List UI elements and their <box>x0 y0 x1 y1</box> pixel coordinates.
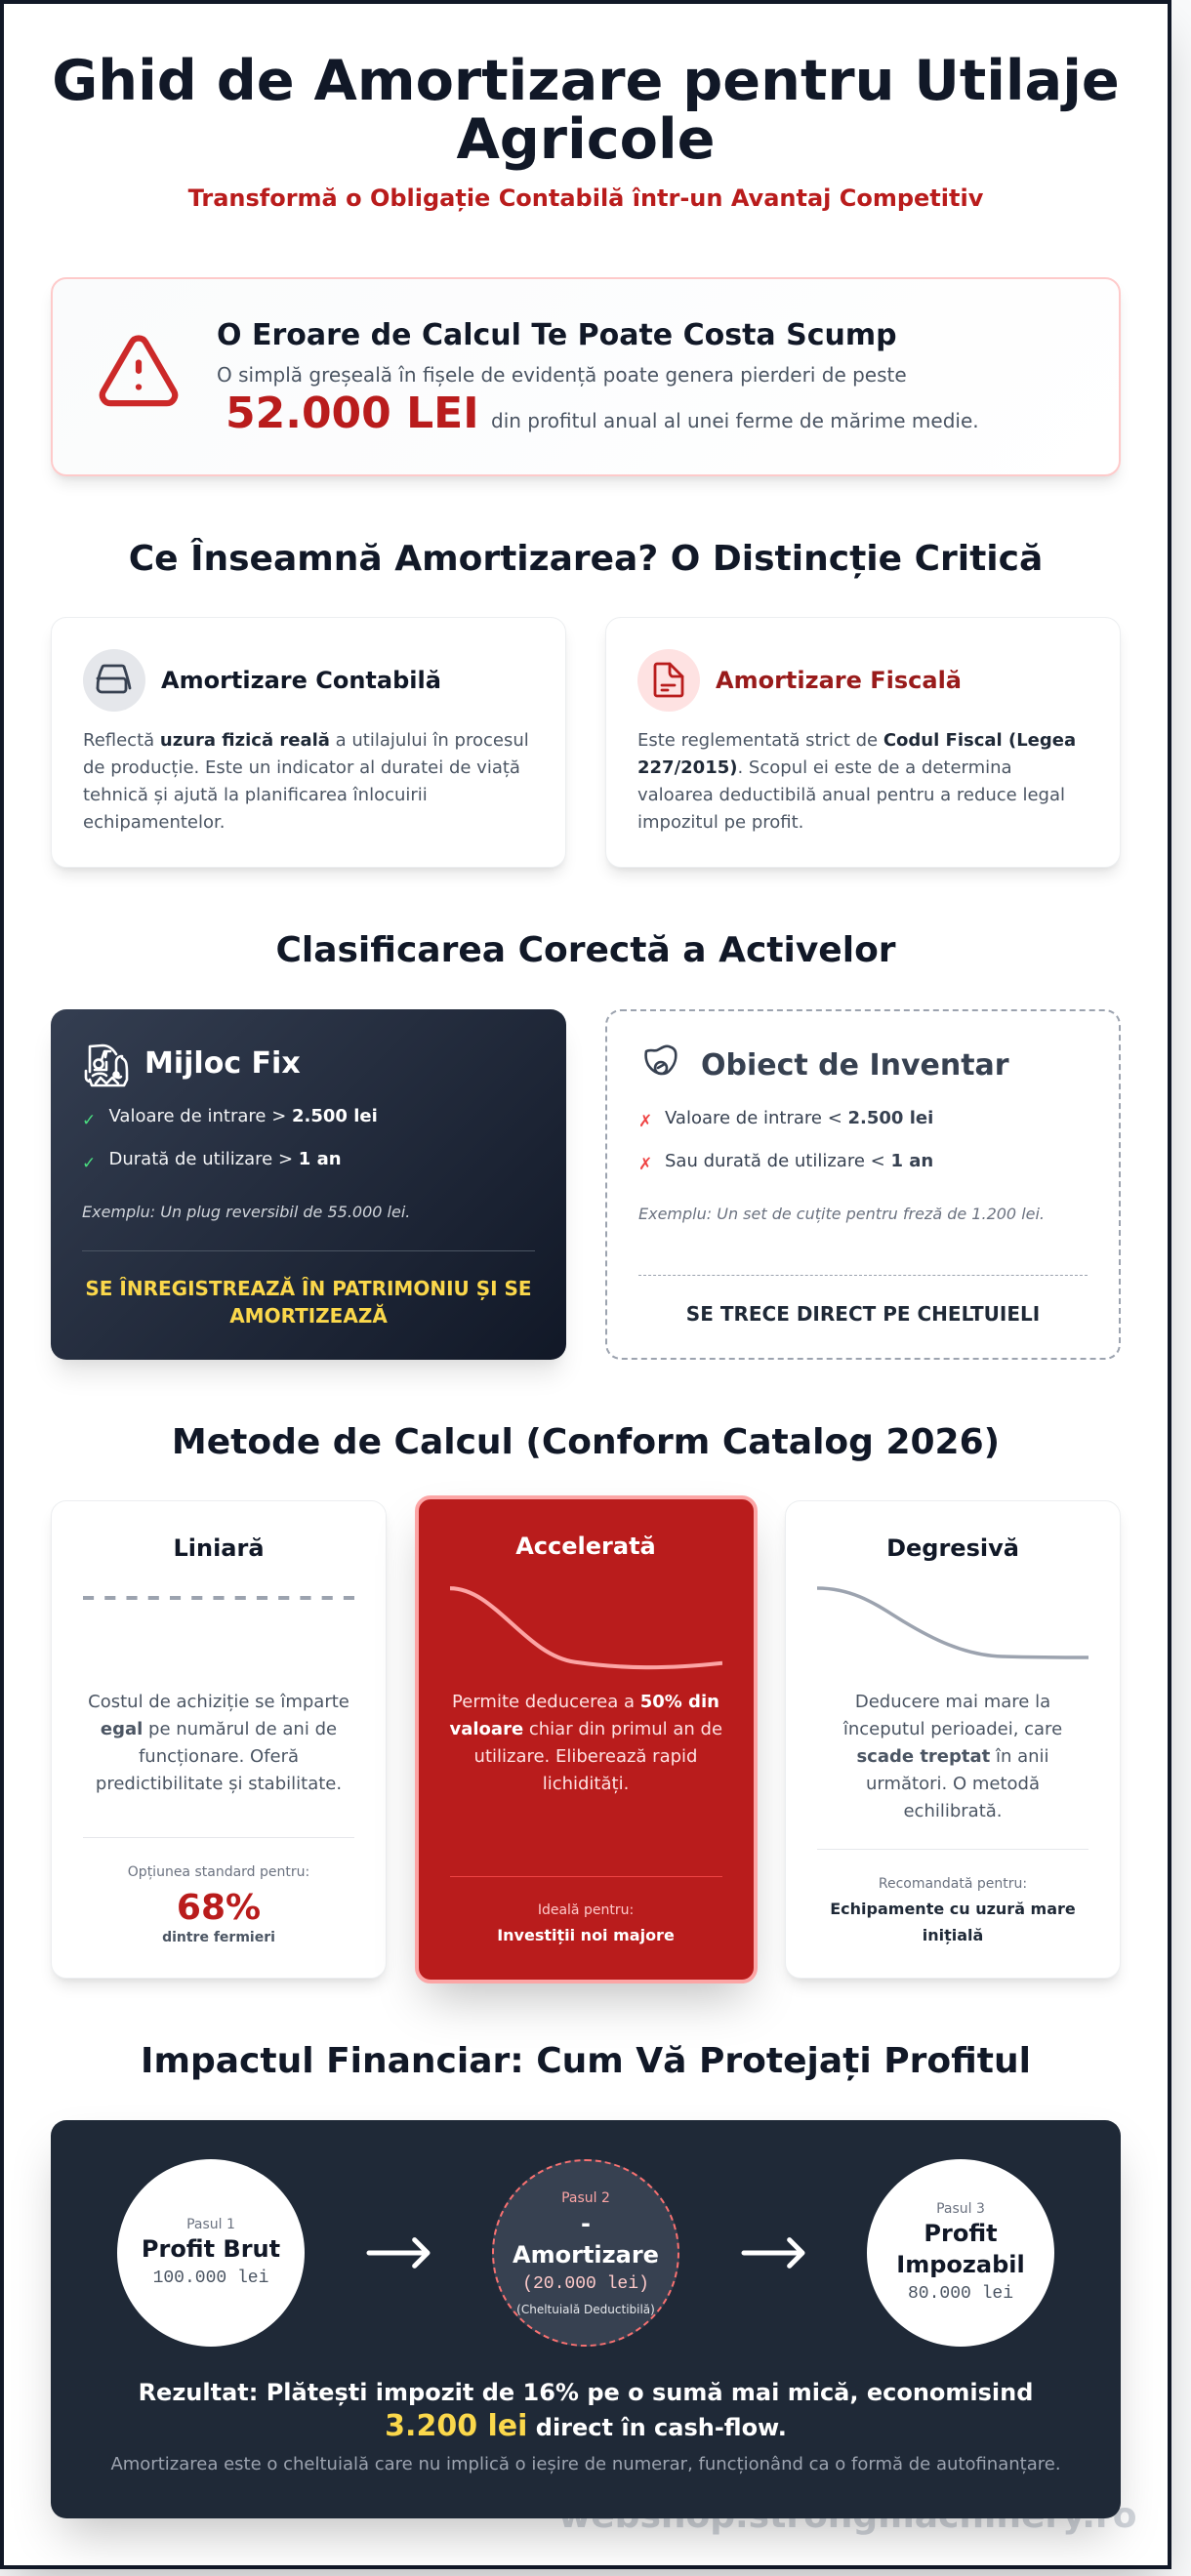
step value: 80.000 lei <box>908 2284 1013 2304</box>
alert text: O simplă greșeală în fișele de evidență poate genera pierderi de peste <box>217 363 907 387</box>
subtitle: Transformă o Obligație Contabilă într-un Avantaj Competitiv <box>188 184 983 212</box>
method text: Permite deducerea a 50% din <box>452 1692 719 1712</box>
step name: - <box>581 2210 591 2237</box>
target <box>830 1900 1076 1944</box>
method text <box>449 1692 722 1794</box>
card title: Amortizare Contabilă <box>161 667 441 694</box>
verdict <box>85 1277 532 1328</box>
step label: Pasul 3 <box>936 2201 985 2217</box>
card text: de producție. Este un indicator al duratei de viață <box>83 757 520 778</box>
panel: linear method <box>51 1500 387 1979</box>
watermark: webshop.strongmachinery.ro <box>558 2496 1136 2536</box>
panel: accelerated method <box>414 1495 758 1983</box>
note: Recomandată pentru: <box>879 1876 1027 1892</box>
card text: impozitul pe profit. <box>637 812 803 833</box>
step name: Impozabil <box>896 2251 1025 2278</box>
criterion text: Durată de utilizare > 1 an <box>109 1149 342 1169</box>
title: Agricole <box>456 106 716 172</box>
method text: funcționare. Oferă <box>139 1746 299 1767</box>
target: Echipamente cu uzură mare <box>830 1900 1076 1918</box>
card text: Reflectă uzura fizică reală a utilajului în procesul <box>83 730 529 751</box>
step value: (20.000 lei) <box>522 2274 649 2294</box>
criterion 2 <box>82 1149 342 1173</box>
check mark: ✓ <box>82 1154 96 1173</box>
card text <box>637 730 1076 833</box>
step value: 100.000 lei <box>153 2269 268 2288</box>
method text: valoare chiar din primul an de <box>449 1719 722 1739</box>
step name <box>513 2210 659 2269</box>
example: Exemplu: Un plug reversibil de 55.000 lei. <box>82 1203 410 1221</box>
arrow 1 <box>367 2237 430 2269</box>
step 1 circle <box>117 2159 305 2347</box>
criterion text: Valoare de intrare < 2.500 lei <box>665 1108 933 1128</box>
criterion 1 <box>638 1108 933 1131</box>
panel: financial impact <box>51 2120 1121 2518</box>
card text: Este reglementată strict de Codul Fiscal (Legea <box>637 730 1076 751</box>
criterion 2 <box>638 1151 933 1174</box>
method text <box>843 1692 1062 1821</box>
method text: Deducere mai mare la <box>855 1692 1050 1712</box>
card text <box>83 730 529 833</box>
verdict: AMORTIZEAZĂ <box>229 1304 388 1328</box>
criterion text: Sau durată de utilizare < 1 an <box>665 1151 933 1171</box>
criterion 1 <box>82 1106 378 1130</box>
heading: financial impact: Impactul Financiar: Cum Vă Protejați Profitul <box>141 2041 1031 2081</box>
alert text end: din profitul anual al unei ferme de mărime medie. <box>491 409 979 432</box>
title <box>52 48 1120 172</box>
heading: classification: Clasificarea Corectă a Activelor <box>275 930 896 970</box>
card text: 227/2015). Scopul ei este de a determina <box>637 757 1012 778</box>
target: inițială <box>923 1925 983 1944</box>
cross mark: ✗ <box>638 1112 652 1131</box>
chart: accelerated curve <box>450 1586 722 1669</box>
panel: alert <box>51 277 1121 476</box>
chart: linear line <box>83 1596 354 1600</box>
panel: fiscal depreciation <box>605 617 1121 868</box>
step 2 circle <box>492 2159 679 2347</box>
method text: echilibrată. <box>903 1801 1003 1821</box>
verdict: SE ÎNREGISTREAZĂ ÎN PATRIMONIU ȘI SE <box>85 1277 532 1300</box>
method text: începutul perioadei, care <box>843 1719 1062 1739</box>
note: Ideală pentru: <box>538 1902 634 1918</box>
method text: următori. O metodă <box>866 1774 1040 1794</box>
step name <box>896 2220 1025 2278</box>
method text: egal pe numărul de ani de <box>101 1719 337 1739</box>
step name: Profit <box>924 2220 998 2247</box>
cross mark: ✗ <box>638 1155 652 1174</box>
check mark: ✓ <box>82 1111 96 1130</box>
card text: echipamentelor. <box>83 812 225 833</box>
method text: predictibilitate și stabilitate. <box>96 1774 342 1794</box>
alert amount: 52.000 LEI <box>226 388 479 438</box>
step note: (Cheltuială Deductibilă) <box>516 2303 655 2316</box>
method text: utilizare. Eliberează rapid <box>474 1746 697 1767</box>
panel: inventory object <box>605 1009 1121 1360</box>
panel: degressive method <box>785 1500 1121 1979</box>
result: 3.200 lei direct în cash-flow. <box>385 2409 787 2442</box>
method title: Degresivă <box>886 1534 1019 1562</box>
heading: methods: Metode de Calcul (Conform Catalog 2026) <box>172 1422 1000 1462</box>
chart: degressive curve <box>817 1586 1088 1659</box>
title: Ghid de Amortizare pentru Utilaje <box>52 48 1120 113</box>
example: Exemplu: Un set de cuțite pentru freză de 1.200 lei. <box>638 1205 1045 1223</box>
icon: accounting <box>83 649 145 712</box>
alert heading: O Eroare de Calcul Te Poate Costa Scump <box>217 318 897 352</box>
card text: valoarea deductibilă anual pentru a reduce legal <box>637 785 1065 805</box>
result <box>139 2379 1033 2442</box>
method text: Costul de achiziție se împarte <box>88 1692 349 1712</box>
icon: inventory tool <box>644 1044 678 1076</box>
card title: Obiect de Inventar <box>701 1048 1009 1083</box>
method title: Liniară <box>173 1534 265 1562</box>
heading: distinction: Ce Înseamnă Amortizarea? O Distincție Critică <box>129 539 1043 579</box>
method title: Accelerată <box>515 1533 656 1560</box>
verdict: SE TRECE DIRECT PE CHELTUIELI <box>686 1302 1040 1326</box>
icon: tractor <box>84 1044 129 1087</box>
step name: Amortizare <box>513 2241 659 2269</box>
stat: 68%: 68% <box>177 1888 261 1928</box>
footnote: Amortizarea este o cheltuială care nu implică o ieșire de numerar, funcționând ca o formă de autofinanțare. <box>110 2454 1061 2474</box>
icon: warning triangle <box>100 335 178 406</box>
card title: Mijloc Fix <box>144 1046 301 1081</box>
method text: scade treptat în anii <box>856 1746 1049 1767</box>
panel: fixed asset <box>51 1009 566 1360</box>
step label: Pasul 2 <box>561 2190 610 2206</box>
stat label: dintre fermieri <box>162 1930 275 1945</box>
arrow 2 <box>742 2237 804 2269</box>
note: Opțiunea standard pentru: <box>128 1864 309 1880</box>
card text: tehnică și ajută la planificarea înlocuirii <box>83 785 428 805</box>
panel: accounting depreciation <box>51 617 566 868</box>
step name: Profit Brut <box>142 2235 280 2263</box>
icon: fiscal document <box>637 649 700 712</box>
step 3 circle <box>867 2159 1054 2347</box>
result: Rezultat: Plătești impozit de 16% pe o sumă mai mică, economisind <box>139 2379 1033 2406</box>
method text: lichidități. <box>543 1774 629 1794</box>
criterion text: Valoare de intrare > 2.500 lei <box>109 1106 378 1126</box>
card title: Amortizare Fiscală <box>716 667 962 694</box>
step label: Pasul 1 <box>186 2217 235 2232</box>
method text <box>88 1692 349 1794</box>
target: Investiții noi majore <box>497 1926 675 1944</box>
